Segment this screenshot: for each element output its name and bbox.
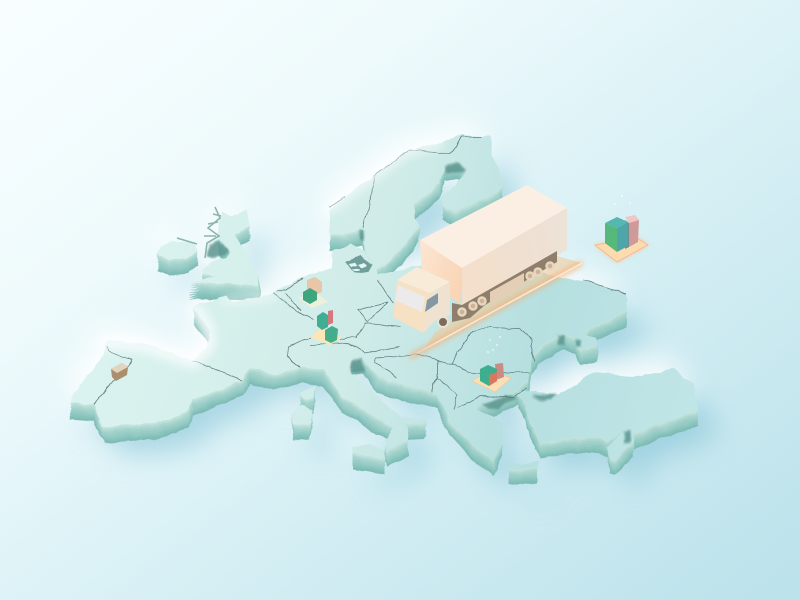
balkan stack on platform bbox=[472, 363, 511, 392]
landmass walls bbox=[70, 136, 698, 485]
truck bbox=[393, 185, 567, 333]
road glow line bbox=[410, 256, 582, 357]
sparkle dots bbox=[487, 195, 631, 353]
country borders bbox=[93, 137, 627, 410]
soft land shadow bbox=[88, 163, 716, 497]
cargo box bbox=[420, 185, 567, 305]
chassis bbox=[452, 251, 557, 322]
wheels bbox=[458, 262, 554, 316]
cab bbox=[393, 267, 450, 333]
deep shaded inlets bbox=[207, 163, 630, 444]
upper central stack bbox=[298, 277, 328, 308]
small truck in Spain bbox=[111, 363, 128, 381]
central stack on platform bbox=[310, 310, 342, 345]
white land glow bbox=[60, 123, 688, 457]
europe landmasses bbox=[70, 135, 698, 485]
denmark islands bbox=[346, 256, 372, 274]
scottish west coast wisps bbox=[177, 207, 221, 258]
landmass top surfaces bbox=[70, 135, 698, 469]
right stack on platform bbox=[595, 215, 648, 262]
white fade along northern coasts bbox=[103, 143, 440, 362]
